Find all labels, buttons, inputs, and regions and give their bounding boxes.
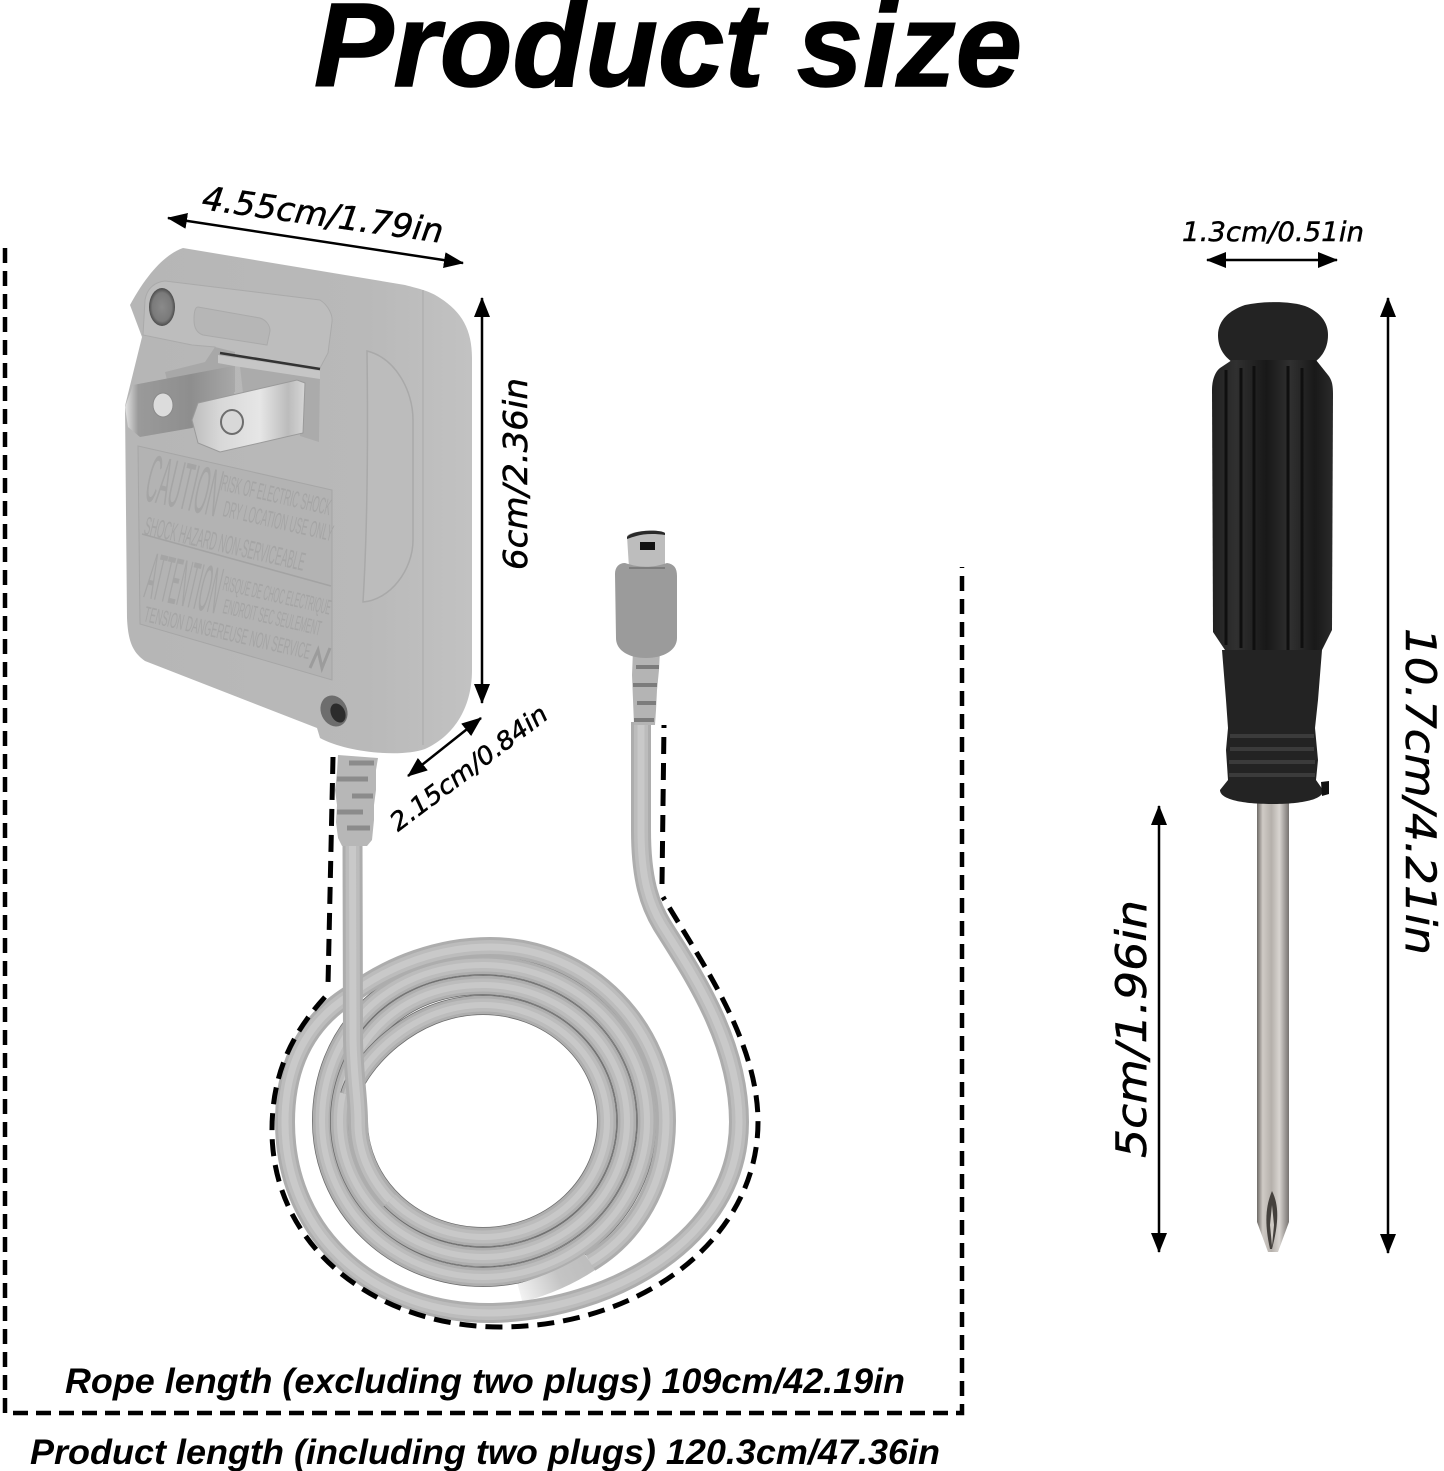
- adapter body: [125, 248, 472, 753]
- label: 4.55cm/1.79in: [200, 178, 446, 251]
- shaft and tapered tip: [1257, 800, 1289, 1252]
- AC adapter: RISK OF ELECTRIC SHOCK: [219, 470, 334, 520]
- tip dark opening: [627, 531, 665, 539]
- inner coil winding: [350, 1005, 607, 1237]
- logo mark: [310, 648, 330, 668]
- tip shadow on housing: [629, 567, 665, 569]
- back prong: [125, 366, 235, 437]
- moulded caution text: ATTENTION: [140, 539, 229, 627]
- plug slit shadow: [220, 353, 320, 369]
- label separator: [142, 534, 331, 586]
- moulded caution text: CAUTION: [140, 442, 229, 531]
- dimension: adapter depth: [384, 699, 553, 837]
- arrow: [1207, 259, 1337, 261]
- strain relief: [335, 755, 378, 846]
- connector strain relief: [632, 650, 660, 725]
- handle grip: [1212, 360, 1333, 650]
- dashed line tracing the cable: [272, 725, 758, 1327]
- label: 2.15cm/0.84in: [384, 699, 553, 837]
- prong holes: [153, 393, 243, 434]
- back edge line: [422, 290, 424, 745]
- clip ridge: [143, 281, 332, 368]
- AC adapter: SHOCK HAZARD NON-SERVICEABLE: [142, 511, 308, 577]
- tip slot: [640, 542, 655, 550]
- metal tip: [627, 531, 665, 568]
- label: 5cm/1.96in: [1107, 900, 1156, 1158]
- AC adapter: RISQUE DE CHOC ELECTRIQUE: [221, 572, 333, 620]
- phillips groove: [1266, 1191, 1277, 1249]
- mounting hole: [149, 288, 175, 326]
- grip flutes: [1226, 366, 1302, 650]
- handle collar: [1220, 650, 1323, 804]
- cable caption: rope length: Rope length (excluding two plugs) 109cm/42.19in: [65, 1362, 905, 1401]
- front prong: [192, 380, 305, 452]
- outer winding to connector: [285, 722, 739, 1313]
- arrow: [481, 298, 483, 703]
- dashed frame: rope length bracket: [5, 248, 962, 1413]
- collar ribs: [1229, 736, 1315, 775]
- AC adapter: DRY LOCATION USE ONLY: [221, 496, 336, 546]
- AC adapter: [125, 248, 472, 846]
- label: 1.3cm/0.51in: [1182, 217, 1364, 248]
- mini connector: [615, 531, 677, 725]
- moulding nub: [1321, 781, 1329, 796]
- base block top face: [218, 355, 320, 379]
- screw: [315, 691, 353, 731]
- third coil winding: [322, 965, 647, 1277]
- side panel: [363, 351, 413, 602]
- arrow: [1387, 298, 1389, 1253]
- plug base block: [218, 357, 320, 442]
- arrow: [168, 218, 463, 263]
- arrow: [1158, 806, 1160, 1252]
- groove highlight: [1270, 1205, 1274, 1246]
- moulded caution text: [140, 442, 336, 664]
- coiled cable: [285, 722, 739, 1313]
- cable caption: product length: Product length (including two plugs) 120.3cm/47.36in: [30, 1433, 940, 1471]
- AC adapter: ENDROIT SEC SEULEMENT: [221, 595, 324, 640]
- arrow: [408, 718, 481, 776]
- connector housing: [615, 563, 677, 658]
- handle head: [1218, 302, 1328, 362]
- caution label recess: [138, 446, 332, 680]
- label: 10.7cm/4.21in: [1396, 628, 1444, 955]
- vertical cord from adapter: [352, 840, 390, 1200]
- screwdriver: [1212, 302, 1333, 1252]
- back prong neck: [165, 347, 235, 392]
- dimension: adapter width: [168, 178, 463, 263]
- AC adapter: TENSION DANGEREUSE NON SERVICE: [142, 602, 313, 664]
- second coil winding: [340, 985, 627, 1257]
- cable glint: [520, 1262, 590, 1293]
- label: 6cm/2.36in: [496, 378, 535, 570]
- recessed pill: [194, 307, 270, 345]
